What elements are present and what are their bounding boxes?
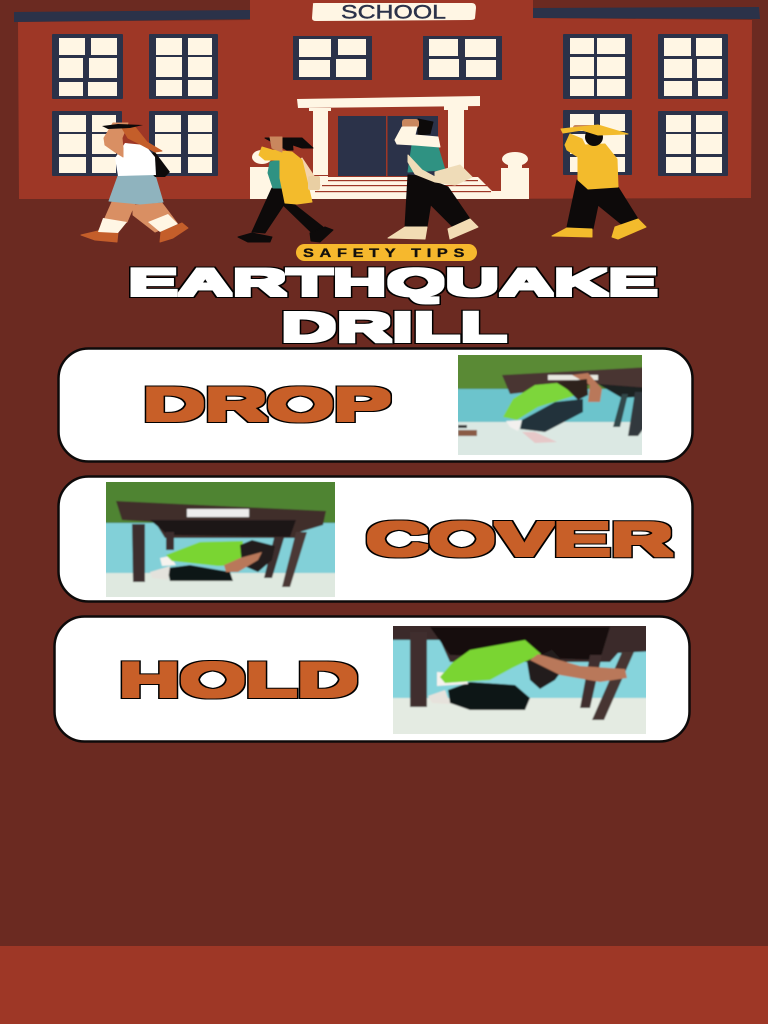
illustration: school building [14, 0, 760, 199]
illustration: student with satchel [388, 119, 478, 239]
footer band [0, 946, 768, 1024]
photo: drop [458, 355, 642, 455]
badge: safety tips [296, 244, 477, 261]
illustration: student holding folder [552, 125, 646, 239]
windows [52, 34, 728, 176]
badge: safety tips: SAFETY TIPS [303, 248, 470, 260]
photo: hold [393, 626, 646, 734]
school sign [312, 2, 476, 24]
label: hold: HOLD [119, 653, 358, 706]
roof left [14, 10, 250, 22]
panel: cover [58, 475, 692, 603]
title: DRILL [281, 304, 507, 350]
panel: hold [54, 616, 690, 742]
entrance portico [250, 96, 529, 199]
illustration: student with ponytail [238, 137, 333, 242]
school sign: SCHOOL [341, 2, 446, 24]
panel: drop [58, 345, 692, 462]
illustration: girl with skirt [81, 123, 188, 242]
label: cover: COVER [366, 513, 673, 565]
photo: cover [106, 482, 335, 597]
roof right [533, 7, 760, 19]
title: EARTHQUAKE [128, 262, 658, 303]
building body [18, 0, 752, 199]
label: drop: DROP [143, 379, 391, 430]
title [128, 262, 658, 350]
